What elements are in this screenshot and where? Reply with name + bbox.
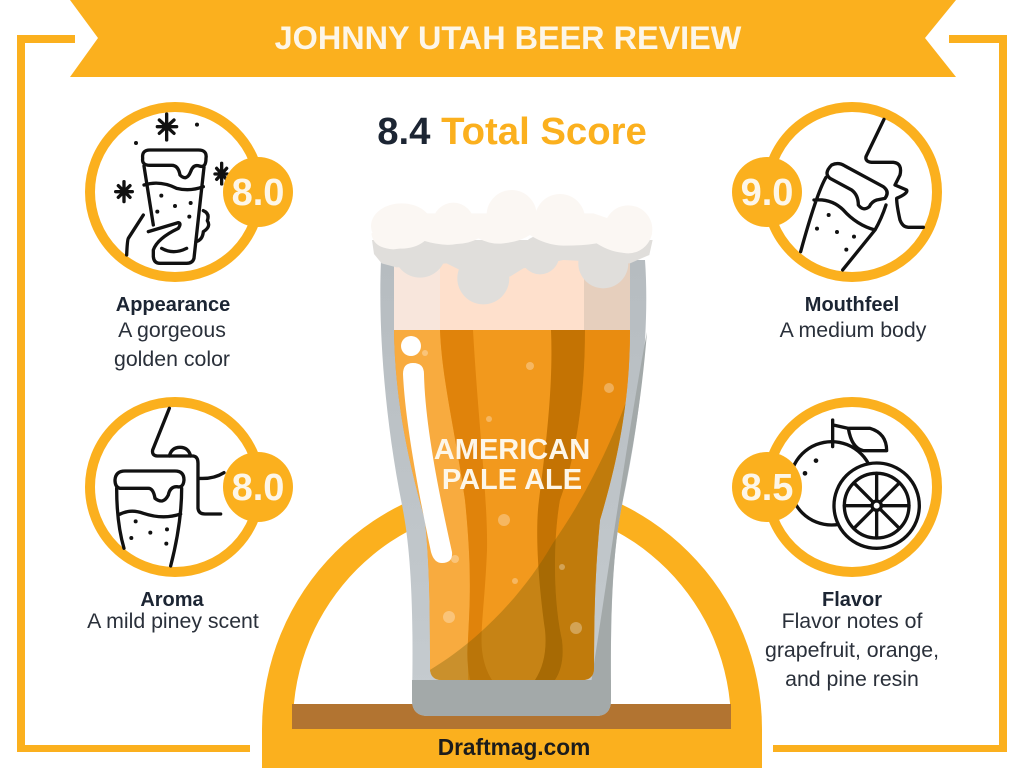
panel: flavor: 8.5	[741, 467, 793, 509]
bubbles and highlight	[401, 336, 421, 356]
panel: mouthfeel: 9.0	[741, 172, 793, 214]
foam	[371, 190, 653, 304]
panel: aroma	[87, 402, 293, 633]
description: A medium body	[780, 318, 927, 342]
description: grapefruit, orange,	[765, 638, 939, 662]
panel: flavor	[732, 402, 939, 691]
panel: aroma: 8.0	[232, 467, 284, 509]
score badge	[732, 157, 802, 227]
score badge	[223, 157, 293, 227]
label: Aroma	[140, 589, 205, 611]
description: Flavor notes of	[782, 609, 923, 633]
arch base	[262, 479, 762, 768]
icon: orange and slice	[790, 420, 919, 548]
title banner: JOHNNY UTAH BEER REVIEW	[275, 20, 742, 56]
description: A gorgeous	[118, 318, 226, 342]
glass shadow	[430, 404, 626, 680]
empty glass above the beer	[394, 260, 630, 330]
panel: mouthfeel	[732, 107, 937, 342]
icon: glass at lips	[801, 119, 923, 270]
label: Appearance	[116, 294, 230, 316]
beer style label: PALE ALE	[442, 464, 582, 496]
icon: nose over glass	[115, 408, 224, 566]
title banner	[70, 0, 956, 77]
glass body	[380, 260, 646, 716]
score badge	[732, 452, 802, 522]
description: A mild piney scent	[87, 609, 259, 633]
label: Flavor	[822, 589, 882, 611]
description: golden color	[114, 347, 230, 371]
panel: appearance	[90, 107, 293, 371]
beer style label: AMERICAN	[434, 434, 590, 466]
total score heading: 8.4 Total Score	[377, 110, 647, 153]
score badge	[223, 452, 293, 522]
beer glass	[371, 190, 653, 716]
beer liquid	[394, 330, 630, 680]
description: and pine resin	[785, 667, 919, 691]
label: Mouthfeel	[805, 294, 899, 316]
icon: beer glass in hand	[116, 114, 227, 263]
source credit: Draftmag.com	[438, 734, 590, 760]
panel: appearance: 8.0	[232, 172, 284, 214]
glass base	[412, 680, 611, 716]
